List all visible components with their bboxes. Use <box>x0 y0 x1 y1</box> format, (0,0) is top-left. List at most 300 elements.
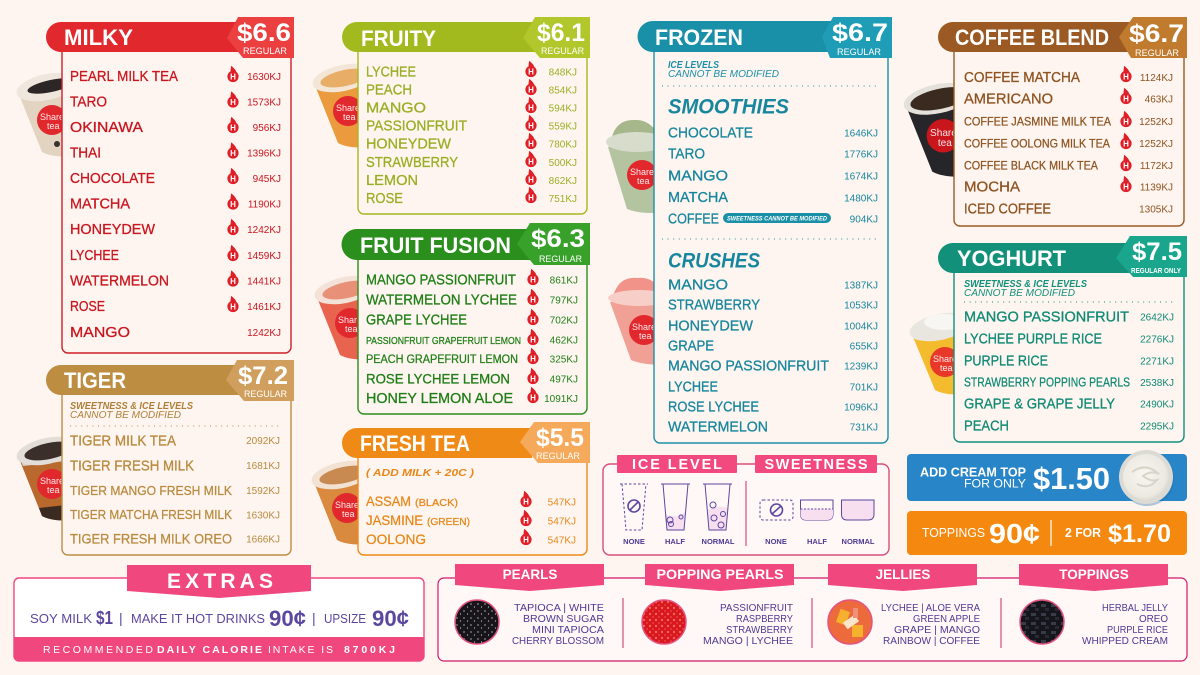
text: jellies list <box>881 602 980 647</box>
drink list: yoghurt: LYCHEE PURPLE RICE <box>964 330 1102 348</box>
heading: coffee blend: COFFEE BLEND <box>955 25 1109 50</box>
drink list: smoothies: CHOCOLATE <box>668 124 753 142</box>
drink list: milky: THAI <box>70 144 101 162</box>
drink list: yoghurt: MANGO PASSIONFRUIT <box>964 308 1129 326</box>
panel: fruity <box>342 17 590 214</box>
icons: hot available, milky: H <box>230 200 236 209</box>
icon: popping pearls photo <box>642 600 686 644</box>
icon: cream bowl <box>1119 450 1174 506</box>
drink cup: yoghurt <box>907 308 973 394</box>
drink list: milky: 1573KJ <box>247 98 281 108</box>
drink list: fresh tea: (BLACK) <box>415 498 458 509</box>
heading: yoghurt: YOGHURT <box>957 246 1067 271</box>
price tag: milky: $6.6 <box>237 19 291 47</box>
promo: toppings price: $1.70 <box>1108 520 1171 548</box>
drink list: fresh tea: 547KJ <box>548 516 576 528</box>
drink cup: crush: Share <box>632 322 656 332</box>
drink list: milky: ROSE <box>70 298 105 315</box>
icon: pearls photo <box>455 600 499 644</box>
drink list: milky: MATCHA <box>70 196 130 212</box>
drink list: fruit fusion: 497KJ <box>550 374 578 386</box>
drink list: smoothies: 1776KJ <box>844 150 878 160</box>
icons: hot available, fresh tea <box>520 491 532 545</box>
price tag: yoghurt <box>1116 236 1187 277</box>
text: popping pearls list: MANGO | LYCHEE <box>703 635 793 647</box>
labels: ice and sweetness levels: NONE <box>765 537 787 546</box>
icons: hot available, fruit fusion <box>527 269 539 403</box>
drink cup: fruit fusion: tea <box>345 324 358 334</box>
drink list: fruit fusion: HONEY LEMON ALOE <box>366 391 513 407</box>
drink list: fruity: ROSE <box>366 190 403 207</box>
icons: hot available, coffee blend <box>1120 66 1132 192</box>
drink list: crushes: 731KJ <box>850 422 878 434</box>
drink list: crushes: 1387KJ <box>844 280 878 292</box>
drink cup: fresh tea: Share <box>335 500 359 510</box>
text: toppings list: PURPLE RICE <box>1107 624 1168 636</box>
drink list: fresh tea <box>366 493 576 547</box>
text: recommended daily intake <box>43 644 395 656</box>
drink list: crushes <box>668 276 878 436</box>
labels: ice and sweetness levels: HALF <box>665 537 685 546</box>
labels: ice and sweetness levels <box>623 537 875 546</box>
text: extras prices <box>30 606 409 631</box>
ribbon: extras <box>127 565 311 598</box>
icons: hot available, fruit fusion: H <box>530 335 536 344</box>
text: toppings list: HERBAL JELLY <box>1102 602 1168 614</box>
drink list: smoothies: MANGO <box>668 168 728 184</box>
drink list: tiger: 2092KJ <box>246 436 280 447</box>
drink list: smoothies: 904KJ <box>850 214 878 226</box>
drink list: coffee blend: COFFEE MATCHA <box>964 69 1080 86</box>
drink list: yoghurt: 2295KJ <box>1140 422 1174 432</box>
text: pearls list: CHERRY BLOSSOM <box>512 635 604 647</box>
drink list: yoghurt: STRAWBERRY POPPING PEARLS <box>964 374 1130 390</box>
drink list: tiger: TIGER FRESH MILK <box>70 458 194 474</box>
icons: hot available, milky: H <box>230 174 236 183</box>
drink list: milky: 1630KJ <box>247 72 281 83</box>
drink cup: crush: tea <box>639 331 652 341</box>
price tag: fruit fusion: REGULAR <box>539 254 582 265</box>
icon: sweetness none <box>760 500 793 520</box>
drink list: crushes: 655KJ <box>850 342 878 352</box>
drink list: coffee blend: MOCHA <box>964 178 1020 196</box>
drink cup: tiger <box>14 432 80 520</box>
text: pearls list: TAPIOCA | WHITE <box>514 602 604 614</box>
text: recommended daily intake: INTAKE IS <box>268 644 333 656</box>
icons: hot available, fruity: H <box>528 85 534 94</box>
drink list: coffee blend: 1139KJ <box>1140 182 1173 194</box>
drink list: milky: 1242KJ <box>247 328 281 339</box>
drink list: fruity: 854KJ <box>549 86 577 96</box>
drink list: crushes: LYCHEE <box>668 378 718 396</box>
icons: hot available, fruity: H <box>528 193 534 202</box>
price tag: frozen: REGULAR <box>837 47 881 58</box>
drink list: yoghurt: 2538KJ <box>1140 378 1174 389</box>
drink cup: coffee: Share <box>930 128 957 139</box>
icon: ice normal <box>703 484 732 530</box>
drink list: coffee blend: 1252KJ <box>1139 117 1173 128</box>
ribbon: popping pearls: POPPING PEARLS <box>656 567 784 582</box>
drink list: smoothies: MATCHA <box>668 189 728 206</box>
text: popping pearls list: STRAWBERRY <box>726 624 793 636</box>
ribbon: ice level <box>617 455 737 473</box>
heading: milky: MILKY <box>64 25 133 50</box>
icon: toppings photo <box>1020 600 1064 644</box>
drink list: fruit fusion: 702KJ <box>550 316 578 326</box>
ribbon: extras: EXTRAS <box>167 570 273 593</box>
drink list: fruit fusion: 797KJ <box>550 296 578 306</box>
text: extras prices: 90¢ <box>372 606 409 631</box>
drink list: fresh tea: ASSAM <box>366 493 411 509</box>
icons: hot available, fresh tea: H <box>523 516 529 525</box>
drink cup: fresh tea <box>309 456 375 544</box>
icon: jellies photo <box>828 600 872 644</box>
drink cup: fruity <box>310 59 376 147</box>
price tag: tiger: REGULAR <box>244 389 287 400</box>
ribbon: toppings <box>1019 564 1168 591</box>
promo: toppings price: TOPPINGS <box>922 526 985 540</box>
drink list: milky <box>70 68 281 341</box>
ribbon: pearls <box>455 564 604 591</box>
text: toppings list: WHIPPED CREAM <box>1082 635 1168 647</box>
drink cup: coffee: tea <box>938 138 952 149</box>
drink list: fruity: 594KJ <box>549 104 577 114</box>
text: extras prices: | <box>312 610 316 626</box>
drink list: crushes: 1004KJ <box>844 322 878 332</box>
drink list: smoothies: TARO <box>668 146 705 162</box>
panel: tiger <box>46 360 294 555</box>
icons: hot available, fruity: H <box>528 139 534 148</box>
note: frozen: ICE LEVELS <box>668 60 719 71</box>
heading: crushes: CRUSHES <box>668 250 760 272</box>
drink list: crushes: WATERMELON <box>668 418 768 436</box>
promo: toppings price: 90¢ <box>989 518 1040 549</box>
price tag: yoghurt: REGULAR ONLY <box>1131 268 1181 275</box>
drink cup: frozen smoothie: tea <box>637 176 650 186</box>
drink list: crushes: STRAWBERRY <box>668 296 760 314</box>
panel: toppings menu <box>438 564 1187 661</box>
drink list: milky: 956KJ <box>253 123 281 134</box>
icons: hot available, coffee blend: H <box>1123 139 1129 148</box>
promo: toppings price <box>907 511 1187 555</box>
panel: coffee blend <box>938 17 1187 226</box>
text: extras prices: | <box>119 610 123 626</box>
price tag: coffee blend: $6.7 <box>1129 20 1184 48</box>
heading: frozen: FROZEN <box>655 25 743 50</box>
drink cup: milky: Share <box>40 112 64 122</box>
drink list: tiger: 1592KJ <box>246 486 280 497</box>
drink list: milky: MANGO <box>70 324 130 341</box>
drink list: coffee blend: 1252KJ <box>1139 139 1173 150</box>
drink list: fresh tea: OOLONG <box>366 531 426 547</box>
drink list: tiger <box>70 432 280 546</box>
drink list: yoghurt: 2490KJ <box>1140 400 1174 410</box>
text: jellies list: LYCHEE | ALOE VERA <box>881 602 980 614</box>
drink list: crushes: MANGO PASSIONFRUIT <box>668 358 829 374</box>
drink cup: coffee <box>901 77 975 177</box>
drink list: coffee blend: COFFEE BLACK MILK TEA <box>964 160 1098 172</box>
panel: frozen <box>638 17 892 443</box>
price tag: tiger: $7.2 <box>238 362 288 390</box>
icons: hot available, coffee blend: H <box>1123 117 1129 126</box>
icons: hot available, fruity: H <box>528 121 534 130</box>
drink list: milky: HONEYDEW <box>70 221 156 238</box>
drink list: milky: OKINAWA <box>70 119 143 136</box>
drink list: crushes: GRAPE <box>668 338 714 354</box>
icon: ice half <box>661 484 690 530</box>
drink cup: fruity: tea <box>343 112 356 122</box>
drink list: smoothies: 1480KJ <box>844 194 878 204</box>
drink list: fresh tea: 547KJ <box>548 536 576 546</box>
price tag: fruity: REGULAR <box>541 46 584 57</box>
icons: hot available, milky: H <box>230 277 236 286</box>
drink list: coffee blend: AMERICANO <box>964 90 1053 108</box>
drink list: yoghurt: PURPLE RICE <box>964 352 1048 370</box>
ribbon: sweetness: SWEETNESS <box>764 457 868 473</box>
icons: hot available, fruit fusion: H <box>530 354 536 363</box>
text: recommended daily intake: RECOMMENDED <box>43 644 153 656</box>
price tag: fruit fusion: $6.3 <box>531 225 585 253</box>
text: recommended daily intake: 8700KJ <box>344 644 395 656</box>
price tag: fruity: $6.1 <box>537 19 585 47</box>
icons: hot available, coffee blend: H <box>1123 182 1129 191</box>
drink list: tiger: TIGER FRESH MILK OREO <box>70 530 232 546</box>
drink list: fruit fusion: ROSE LYCHEE LEMON <box>366 370 510 386</box>
drink list: fruit fusion <box>366 272 578 407</box>
labels: ice and sweetness levels: NONE <box>623 537 645 546</box>
drink list: smoothies: COFFEE <box>668 210 719 228</box>
price tag: tiger <box>226 360 294 401</box>
panel: ice level and sweetness <box>603 455 889 555</box>
note: frozen <box>668 60 779 80</box>
drink list: fresh tea: JASMINE <box>366 512 423 528</box>
drink list: crushes: 1096KJ <box>844 402 878 414</box>
drink list: milky: CHOCOLATE <box>70 170 155 187</box>
price tag: milky: REGULAR <box>243 46 287 57</box>
ribbon: pearls: PEARLS <box>503 567 557 582</box>
drink list: tiger: TIGER MATCHA FRESH MILK <box>70 507 232 522</box>
drink list: yoghurt: 2271KJ <box>1140 356 1174 368</box>
price tag: frozen: $6.7 <box>832 19 888 47</box>
icons: hot available, fruity: H <box>528 67 534 76</box>
drink cup: tiger: tea <box>47 485 60 495</box>
icons: hot available, coffee blend: H <box>1123 161 1129 170</box>
icons: hot available, milky <box>227 66 239 312</box>
price tag: fresh tea: $5.5 <box>536 424 584 452</box>
drink cup: yoghurt: Share <box>933 354 957 364</box>
drink list: fruit fusion: PASSIONFRUIT GRAPEFRUIT LEMON <box>366 336 521 347</box>
drink list: fruity: 862KJ <box>549 176 577 187</box>
panel: fresh tea <box>342 422 590 555</box>
ribbon: toppings: TOPPINGS <box>1059 567 1129 582</box>
drink cup: fruit fusion <box>312 271 378 360</box>
drink list: fruity: STRAWBERRY <box>366 154 458 171</box>
drink list: yoghurt: 2276KJ <box>1140 334 1174 346</box>
drink list: crushes: ROSE LYCHEE <box>668 398 759 416</box>
drink list: milky: 1190KJ <box>248 200 281 210</box>
drink list: fruity: 780KJ <box>549 140 577 150</box>
drink list: fruity: LYCHEE <box>366 64 416 80</box>
drink list: yoghurt <box>964 308 1174 434</box>
text: pearls list <box>512 602 604 647</box>
drink list: coffee blend: 1172KJ <box>1140 161 1173 172</box>
drink list: fruity: MANGO <box>366 100 426 116</box>
note: yoghurt: CANNOT BE MODIFIED <box>964 288 1075 299</box>
heading: smoothies: SMOOTHIES <box>668 96 789 118</box>
icons: hot available, fruit fusion: H <box>530 315 536 324</box>
drink cup: fruity: Share <box>336 103 360 113</box>
panel: fruit fusion <box>342 223 590 414</box>
promo: cream top: ADD CREAM TOP <box>920 464 1026 480</box>
icons: hot available, fruit fusion: H <box>530 374 536 383</box>
icons: hot available, milky: H <box>230 123 236 132</box>
price tag: fresh tea: REGULAR <box>536 451 580 462</box>
text: popping pearls list: RASPBERRY <box>736 613 793 625</box>
panel: yoghurt <box>938 236 1187 442</box>
icons: hot available, milky: H <box>230 72 236 81</box>
icon: ice none <box>620 484 648 530</box>
text: recommended daily intake: DAILY CALORIE <box>157 644 262 656</box>
icons: hot available, fruity: H <box>528 103 534 112</box>
panel: extras <box>14 565 424 661</box>
icons: hot available, fruit fusion: H <box>530 393 536 402</box>
icons: hot available, milky: H <box>230 302 236 311</box>
drink cup: yoghurt: tea <box>940 363 953 373</box>
drink list: crushes: 701KJ <box>850 382 878 394</box>
drink list: smoothies: 1674KJ <box>844 172 878 182</box>
drink cup: milky: tea <box>47 121 60 131</box>
icon: sweetness normal <box>842 500 874 520</box>
drink list: coffee blend: COFFEE OOLONG MILK TEA <box>964 138 1110 150</box>
drink cup: fruit fusion: Share <box>338 315 362 325</box>
labels: ice and sweetness levels: NORMAL <box>842 537 875 546</box>
drink list: tiger: TIGER MILK TEA <box>70 432 176 450</box>
promo: cream top <box>907 450 1187 506</box>
drink cup: frozen smoothie: Share <box>630 167 654 177</box>
drink list: crushes: MANGO <box>668 276 728 294</box>
drink list: fruity: 500KJ <box>549 158 577 169</box>
price tag: yoghurt: $7.5 <box>1132 238 1182 266</box>
note: yoghurt <box>964 279 1087 299</box>
labels: ice and sweetness levels: NORMAL <box>702 537 735 546</box>
icons: hot available, fruit fusion: H <box>530 275 536 284</box>
drink list: milky: 1461KJ <box>247 302 281 313</box>
drink list: tiger: 1630KJ <box>246 510 280 522</box>
drink list: milky: 1396KJ <box>247 148 281 160</box>
drink list: milky: 1441KJ <box>247 276 281 288</box>
price tag: milky <box>227 17 294 58</box>
drink list: milky: 945KJ <box>253 174 281 185</box>
drink list: fruity: PASSIONFRUIT <box>366 118 467 134</box>
text: jellies list: GREEN APPLE <box>913 613 980 625</box>
note: tiger <box>70 401 193 421</box>
drink list: yoghurt: GRAPE & GRAPE JELLY <box>964 396 1115 412</box>
text: popping pearls list <box>703 602 794 647</box>
note: tiger: CANNOT BE MODIFIED <box>70 410 181 421</box>
drink list: milky: TARO <box>70 94 107 110</box>
text: jellies list: RAINBOW | COFFEE <box>883 635 980 647</box>
drink list: crushes: HONEYDEW <box>668 318 754 334</box>
drink list: fruit fusion: GRAPE LYCHEE <box>366 312 467 328</box>
price tag: frozen <box>822 17 892 58</box>
heading: tiger: TIGER <box>64 368 126 393</box>
drink cup: crush <box>608 278 670 364</box>
drink list: milky: WATERMELON <box>70 272 169 290</box>
ribbon: ice level: ICE LEVEL <box>632 457 722 473</box>
text: extras prices: SOY MILK <box>30 611 92 626</box>
drink list: milky: LYCHEE <box>70 247 119 264</box>
drink list: smoothies <box>668 124 878 228</box>
drink list: fruity: HONEYDEW <box>366 136 452 152</box>
text: toppings list <box>1082 602 1168 647</box>
drink list: coffee blend: ICED COFFEE <box>964 200 1051 218</box>
drink cup: fresh tea: tea <box>342 509 355 519</box>
icons: hot available, coffee blend: H <box>1123 72 1129 81</box>
price tag: fresh tea <box>520 422 590 463</box>
drink list: milky: PEARL MILK TEA <box>70 68 178 85</box>
drink list: smoothies: 1646KJ <box>844 128 878 140</box>
text: extras prices: UPSIZE <box>324 611 366 626</box>
drink list: fruit fusion: 1091KJ <box>544 394 578 405</box>
drink list: fruity: PEACH <box>366 82 412 98</box>
drink list: yoghurt: PEACH <box>964 418 1009 434</box>
icons: hot available, coffee blend: H <box>1123 94 1129 103</box>
drink list: fruit fusion: 861KJ <box>550 276 578 286</box>
promo: cream top: FOR ONLY <box>964 476 1026 490</box>
drink list: coffee blend: 463KJ <box>1145 94 1173 106</box>
icons: hot available, fruity: H <box>528 175 534 184</box>
drink list: milky: 1459KJ <box>247 251 281 262</box>
drink list: fruity <box>366 64 577 207</box>
price tag: fruity <box>523 17 590 58</box>
text: pearls list: MINI TAPIOCA <box>532 624 604 636</box>
price tag: coffee blend <box>1119 17 1187 59</box>
icons: hot available, fresh tea: H <box>523 535 529 544</box>
drink list: fruit fusion: 325KJ <box>550 354 578 366</box>
icons: hot available, fruit fusion: H <box>530 295 536 304</box>
text: toppings list: OREO <box>1139 613 1168 625</box>
drink list: fruity: 848KJ <box>549 68 577 78</box>
panel: milky <box>46 17 294 353</box>
text: popping pearls list: PASSIONFRUIT <box>720 602 794 614</box>
icon: sweetness half <box>800 500 833 520</box>
icons: hot available, milky: H <box>230 98 236 107</box>
ribbon: jellies <box>828 564 977 591</box>
note: yoghurt: SWEETNESS & ICE LEVELS <box>964 279 1087 290</box>
promo: cream top: $1.50 <box>1033 461 1110 496</box>
icons: hot available, fruity <box>525 61 537 203</box>
drink cup: frozen smoothie <box>606 120 668 213</box>
drink list: fruity: LEMON <box>366 172 418 189</box>
drink list: tiger: TIGER MANGO FRESH MILK <box>70 483 232 498</box>
drink list: fruit fusion: 462KJ <box>550 336 578 346</box>
drink list: milky: 1242KJ <box>247 225 281 236</box>
promo: toppings price: 2 FOR <box>1065 526 1101 540</box>
drink list: fruit fusion: PEACH GRAPEFRUIT LEMON <box>366 354 518 366</box>
icons: hot available, fruity: H <box>528 157 534 166</box>
note: add milk: ( ADD MILK + 20C ) <box>366 468 475 479</box>
heading: fruit fusion: FRUIT FUSION <box>360 233 511 258</box>
ribbon: popping pearls <box>645 564 794 591</box>
drink list: fresh tea: (GREEN) <box>427 517 470 528</box>
drink list: fruity: 559KJ <box>549 122 577 132</box>
ribbon: jellies: JELLIES <box>876 567 930 582</box>
icons: hot available, milky: H <box>230 149 236 158</box>
icons: hot available, fresh tea: H <box>523 497 529 506</box>
text: pearls list: BROWN SUGAR <box>523 613 604 625</box>
text: extras prices: $1 <box>96 608 113 628</box>
drink cup: milky <box>14 68 80 156</box>
